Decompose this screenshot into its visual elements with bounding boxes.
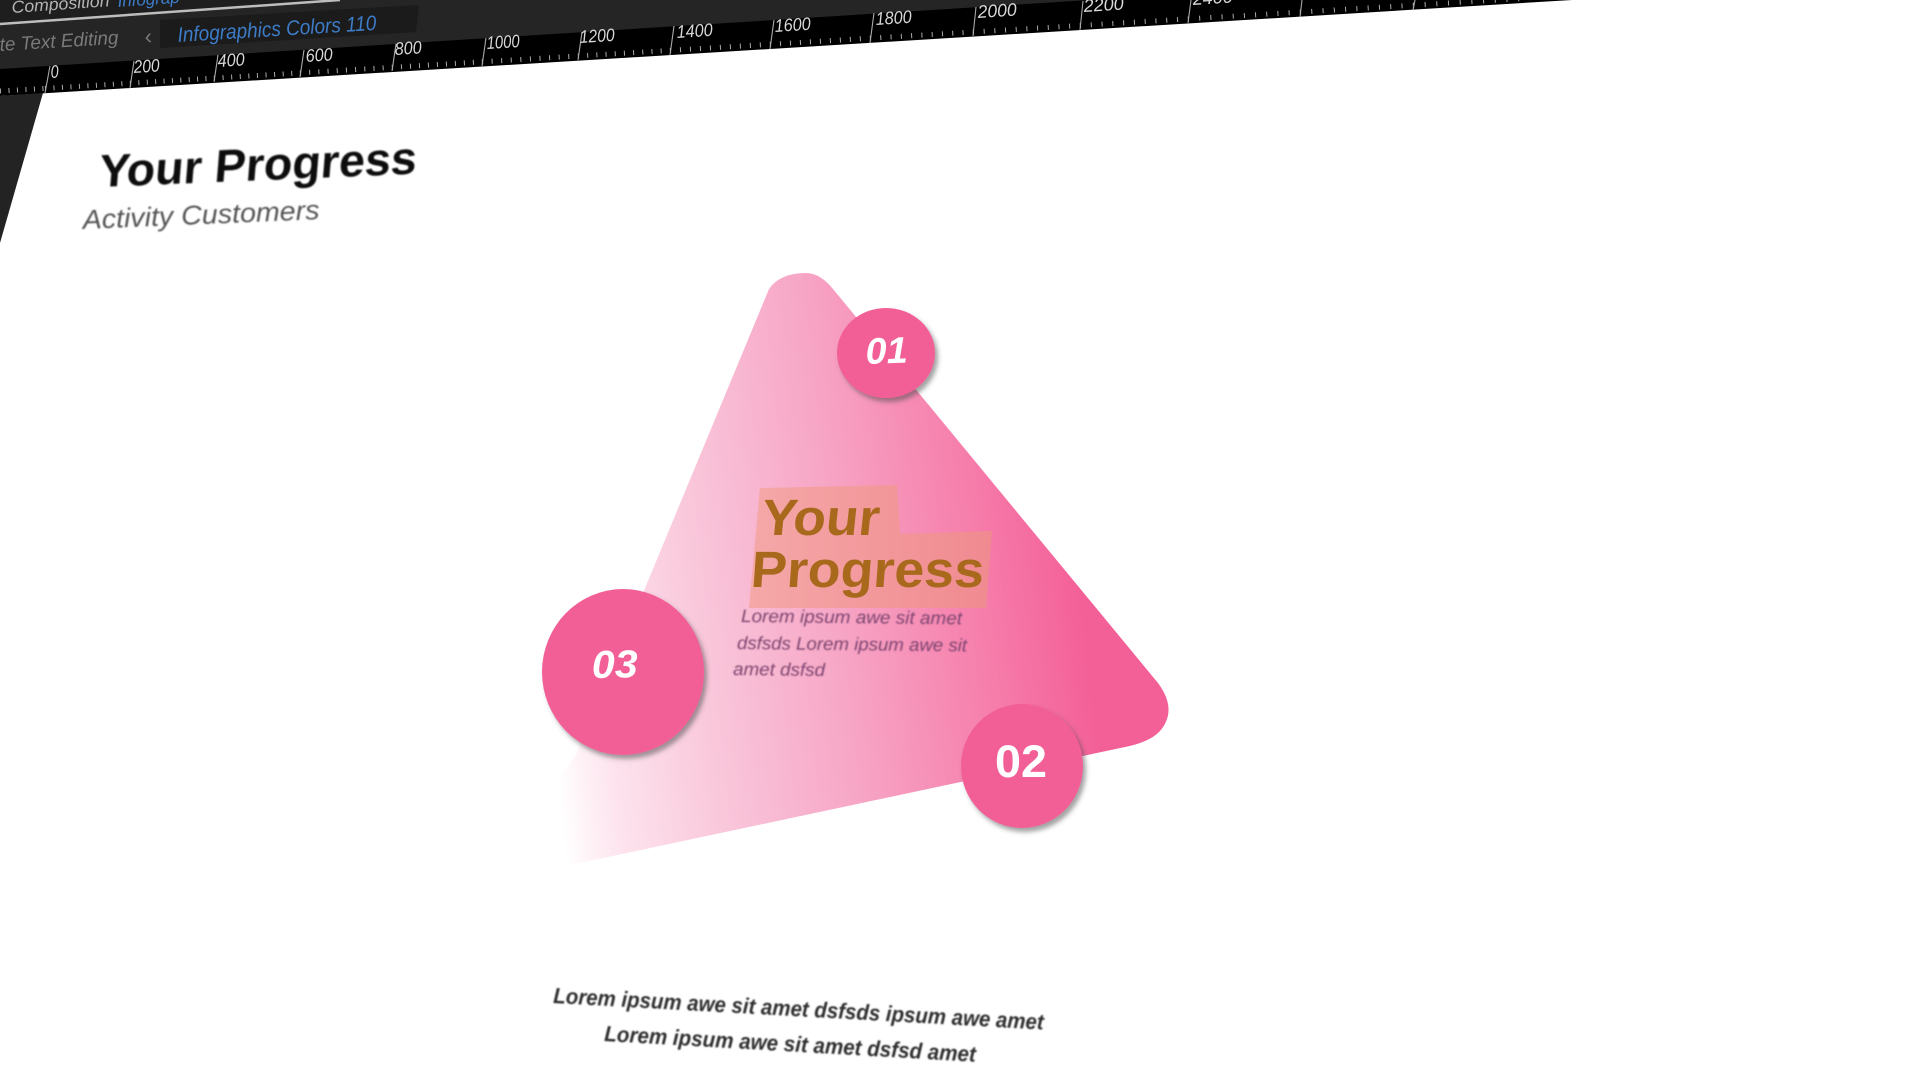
badge 03: 03 [591,643,638,687]
timeline ruler: 200 [132,55,160,77]
badge 02 [961,704,1083,828]
centre description: Lorem ipsum awe sit amet [741,606,963,628]
bottom caption: Lorem ipsum awe sit amet dsfsd amet [604,1021,978,1067]
subtitle: Activity Customers [80,195,320,235]
centre description: dsfsds Lorem ipsum awe sit [737,633,968,655]
timeline ruler: 1000 [486,31,520,53]
timeline ruler: 1200 [579,25,615,47]
centre heading with highlight: Your [759,489,883,546]
badge 03 [542,589,704,755]
badge 01: 01 [865,330,908,372]
timeline ruler: 800 [394,37,422,59]
centre description: amet dsfsd [733,659,826,680]
timeline ruler: 600 [305,44,333,66]
editor top bar: Infographics Colors 110 [177,12,377,47]
timeline ruler: 1400 [676,20,713,42]
editor top bar: te Text Editing [0,28,119,56]
bottom caption [553,983,1046,1067]
badge 02: 02 [995,736,1047,787]
timeline ruler [0,0,1572,96]
bottom caption: Lorem ipsum awe sit amet dsfsds ipsum awe amet [553,983,1046,1035]
badge 01 [837,308,935,398]
timeline ruler: 2000 [976,0,1017,22]
title: Your Progress [97,132,419,197]
editor top bar [0,0,1120,72]
timeline ruler: 0 [50,62,59,82]
centre heading with highlight [749,485,992,608]
gradient triangle [552,273,1169,865]
editor top bar: ‹ [144,24,153,49]
editor left panel [0,93,43,243]
timeline ruler: 400 [217,49,245,71]
timeline ruler: 1800 [875,7,912,29]
timeline ruler: 1600 [774,14,811,36]
centre description [733,606,968,680]
centre heading with highlight: Progress [749,541,986,598]
